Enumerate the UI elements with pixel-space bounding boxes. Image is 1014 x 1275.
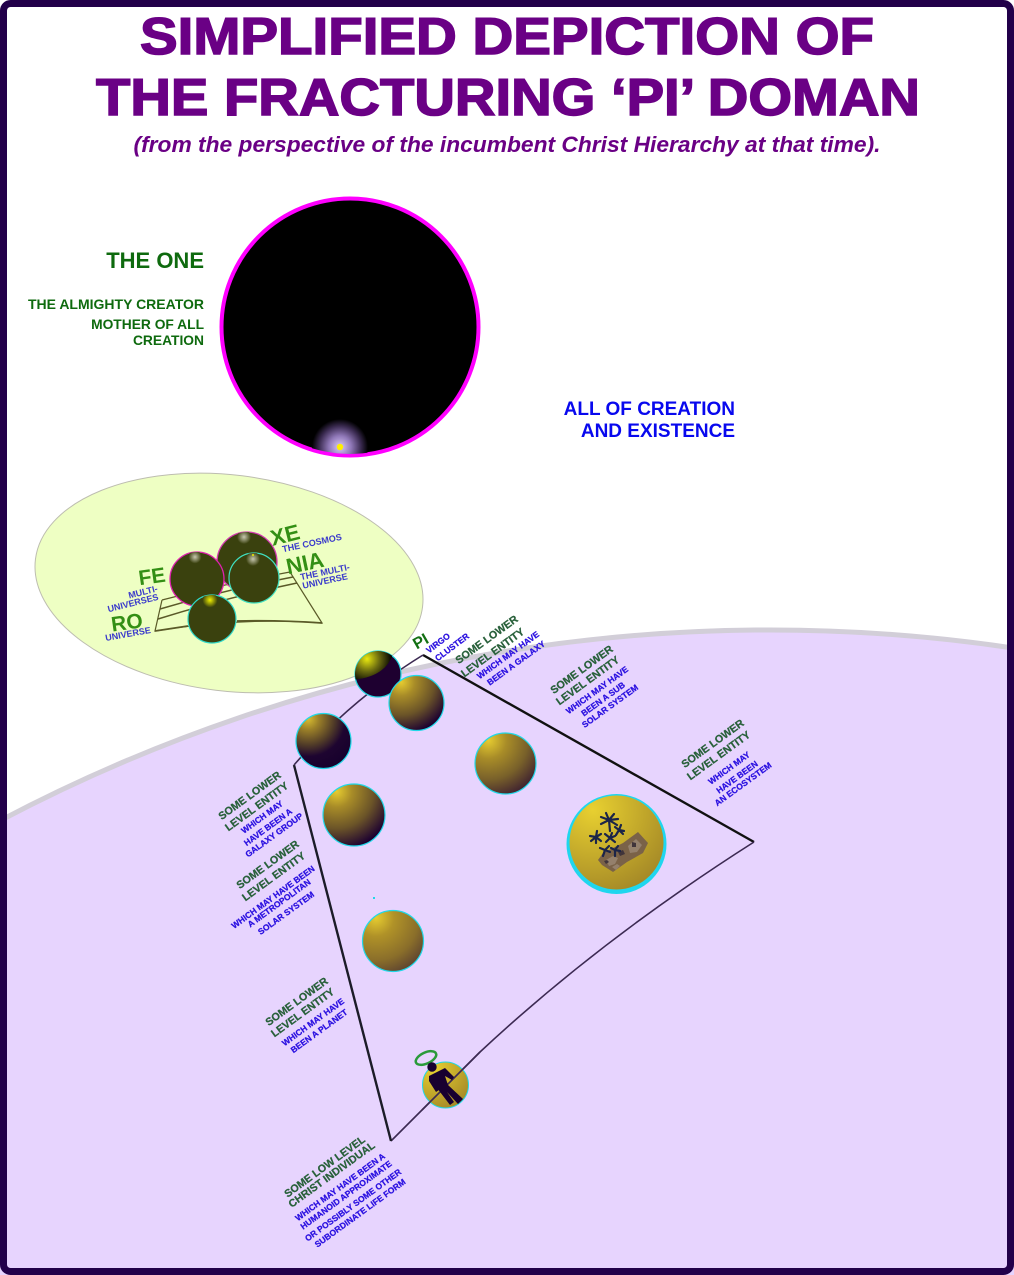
label: The One: MOTHER OF ALL: [91, 317, 204, 332]
label: all of creation: ALL OF CREATION: [564, 399, 735, 420]
label: planet: LEVEL ENTITY: [269, 986, 337, 1040]
icon: palm trees: [590, 813, 624, 856]
label: The One: [28, 248, 204, 348]
yellow-green ellipse: higher domains: UNIVERSES: [107, 592, 159, 614]
label: sub solar system: LEVEL ENTITY: [554, 654, 622, 708]
label: galaxy group: LEVEL ENTITY: [223, 780, 291, 834]
label: metropolitan solar system: [229, 838, 317, 937]
title: SIMPLIFIED DEPICTION OF: [140, 8, 874, 66]
label: Pi: PI: [410, 631, 432, 653]
label: sub solar system: [548, 643, 640, 730]
sphere: galaxy group: [296, 714, 351, 768]
label: sub solar system: BEEN A SUB: [579, 680, 627, 718]
icon: human figure: [427, 1062, 463, 1105]
label: The One: THE ALMIGHTY CREATOR: [28, 296, 204, 312]
label: metropolitan solar system: SOLAR SYSTEM: [256, 889, 316, 937]
label: galaxy group: SOME LOWER: [216, 769, 284, 823]
label: Pi: CLUSTER: [433, 631, 471, 663]
label: galaxy: BEEN A GALAXY: [485, 638, 547, 687]
icon: island rocks: [598, 832, 648, 872]
label: sub solar system: SOLAR SYSTEM: [580, 682, 640, 730]
label: sub solar system: SOME LOWER: [548, 643, 616, 697]
yellow-green ellipse: higher domains: UNIVERSE: [104, 625, 152, 643]
labels: FE: [137, 564, 167, 590]
yellow-green ellipse: higher domains: UNIVERSE: [301, 571, 349, 591]
label: The One: THE ONE: [106, 248, 204, 273]
sphere: ecosystem with palm island: [566, 794, 666, 894]
sphere: Christ individual with figure and halo: [414, 1048, 480, 1110]
sphere: sub solar system: [475, 733, 536, 794]
sphere: Xe: [217, 530, 277, 592]
label: ecosystem: AN ECOSYSTEM: [713, 760, 773, 808]
label: galaxy group: GALAXY GROUP: [243, 811, 305, 859]
label: galaxy group: HAVE BEEN A: [242, 806, 294, 848]
label: Christ individual: HUMANOID APPROXIMATE: [298, 1158, 394, 1232]
title: THE FRACTURING ‘PI’ DOMAN: [96, 69, 920, 127]
label: sub solar system: WHICH MAY HAVE: [564, 664, 630, 716]
sphere: planet: [362, 910, 424, 972]
sphere: metropolitan solar system: [323, 784, 385, 846]
label: Pi: VIRGO: [424, 631, 452, 655]
sphere: galaxy: [389, 676, 444, 730]
triangle: Pi domain outline: [294, 655, 754, 1141]
label: galaxy group: [216, 769, 305, 859]
label: ecosystem: WHICH MAY: [706, 749, 752, 787]
label: Christ individual: SOME LOW LEVEL: [282, 1133, 368, 1200]
yellow-green ellipse: higher domains: XE: [268, 519, 302, 551]
black sphere: The One: [222, 198, 478, 475]
label: Christ individual: OR POSSIBLY SOME OTHER: [303, 1167, 403, 1243]
label: all of creation: AND EXISTENCE: [581, 421, 735, 442]
title: [96, 8, 920, 127]
label: metropolitan solar system: A METROPOLITAN: [245, 877, 313, 929]
label: Christ individual: WHICH MAY HAVE BEEN A: [293, 1151, 387, 1223]
label: galaxy: WHICH MAY HAVE: [475, 629, 541, 681]
multiverse sheet lines: [155, 572, 322, 631]
label: metropolitan solar system: LEVEL ENTITY: [240, 850, 308, 904]
yellow-green ellipse: higher domains: MULTI-: [127, 584, 159, 600]
sphere: Pi virgo cluster: [354, 650, 402, 698]
label: Christ individual: [282, 1133, 407, 1249]
background: purple domain dome: [0, 630, 1014, 1275]
label: galaxy group: WHICH MAY: [239, 798, 285, 836]
label: The One: CREATION: [133, 333, 204, 348]
label: ecosystem: LEVEL ENTITY: [685, 729, 753, 783]
yellow-green ellipse: higher domains: NIA: [284, 547, 326, 579]
yellow-green ellipse: higher domains: THE MULTI-: [299, 562, 351, 582]
label: Christ individual: CHRIST INDIVIDUAL: [286, 1139, 378, 1210]
label: Pi: [410, 631, 471, 663]
label: galaxy: LEVEL ENTITY: [459, 626, 527, 680]
icon: halo: [414, 1048, 438, 1068]
label: metropolitan solar system: WHICH MAY HAVE BEEN: [229, 863, 317, 931]
label: metropolitan solar system: SOME LOWER: [234, 838, 302, 892]
sphere: Ro: [188, 592, 236, 643]
label: ecosystem: SOME LOWER: [679, 717, 747, 771]
label: ecosystem: HAVE BEEN: [714, 759, 760, 795]
label: planet: [263, 975, 350, 1055]
label: galaxy: SOME LOWER: [453, 613, 521, 667]
label: planet: SOME LOWER: [263, 975, 331, 1029]
subtitle: (from the perspective of the incumbent Christ Hierarchy at that time).: [134, 132, 880, 157]
yellow-green ellipse: higher domains: RO: [110, 609, 144, 637]
sphere: Nia: [229, 552, 279, 603]
yellow-green ellipse: higher domains: [34, 472, 424, 694]
label: planet: WHICH MAY HAVE: [280, 996, 346, 1048]
yellow-green ellipse: higher domains: THE COSMOS: [281, 532, 343, 554]
sphere: Fe: [170, 550, 224, 606]
label: all of creation: [564, 399, 735, 442]
label: planet: BEEN A PLANET: [289, 1007, 350, 1055]
label: Christ individual: SUBORDINATE LIFE FORM: [313, 1177, 407, 1249]
label: galaxy: [453, 613, 547, 687]
label: ecosystem: [679, 717, 773, 808]
